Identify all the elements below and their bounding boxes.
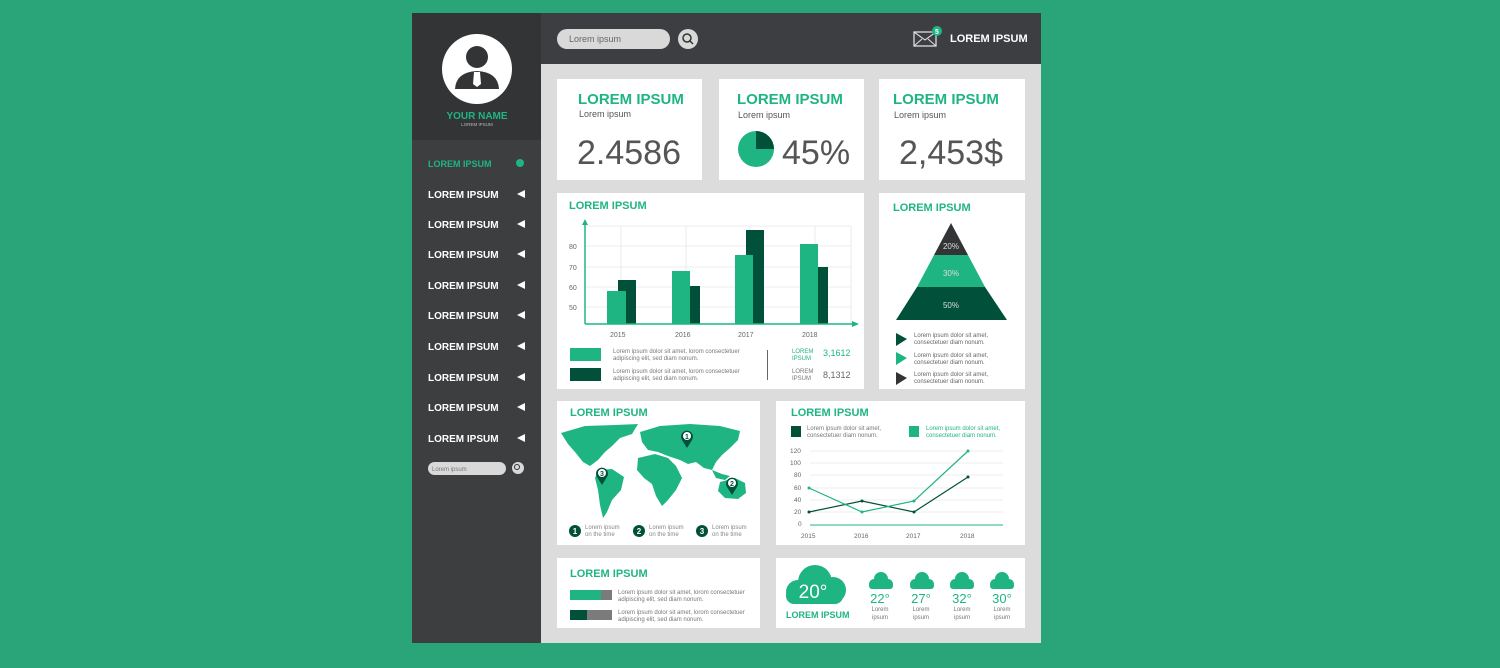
pins: 2 (730, 481, 734, 488)
panel: bar chart: 2016 (675, 332, 691, 339)
card: 2.4586: Lorem ipsum (579, 109, 631, 119)
icon: mail (914, 26, 942, 46)
panel: line chart: Lorem ipsum dolor sit amet, (807, 426, 881, 432)
legend: 8,1312 (823, 370, 851, 380)
legend: LOREM (792, 349, 813, 355)
menu: LOREM IPSUM (428, 342, 499, 353)
panel: bar chart: 2018 (802, 332, 818, 339)
panel: weather: Lorem (953, 607, 971, 613)
panel: weather: 22° (870, 591, 890, 606)
panel: pyramid: Lorem ipsum dolor sit amet, (914, 333, 988, 339)
avatar (442, 34, 512, 104)
panel: line chart: 80 (794, 472, 802, 479)
panel: bar chart: 60 (569, 285, 577, 292)
pins: 3 (600, 471, 604, 478)
top bar: LOREM IPSUM (950, 33, 1028, 45)
panel: pyramid: 20% (943, 242, 959, 251)
panel: weather: Lorem (871, 607, 889, 613)
map shapes (561, 424, 746, 518)
menu: LOREM IPSUM (428, 281, 499, 292)
panel: bar chart: LOREM IPSUM (569, 200, 647, 212)
legend: IPSUM (792, 356, 811, 362)
panel: line chart: 2017 (906, 533, 921, 540)
pins: 1 (685, 434, 689, 441)
panel: weather: Lorem (912, 607, 930, 613)
map legend: 3 (700, 527, 705, 536)
map legend: Lorem ipsum (585, 525, 620, 531)
menu: LOREM IPSUM (428, 373, 499, 384)
name: LOREM IPSUM (461, 122, 493, 127)
card: 2,453$: 2,453$ (899, 134, 1003, 172)
panel: bar chart: 70 (569, 265, 577, 272)
card: 2,453$: Lorem ipsum (894, 110, 946, 120)
panel: weather: 32° (952, 591, 972, 606)
card: 45%: Lorem ipsum (738, 110, 790, 120)
panel: bar chart: 80 (569, 244, 577, 251)
card: 45%: 45% (782, 134, 850, 172)
panel: progress bars: Lorem ipsum dolor sit amet, lorom consectetuer (618, 610, 745, 616)
menu: LOREM IPSUM (428, 434, 499, 445)
name (446, 111, 508, 127)
menu (428, 159, 525, 445)
panel: weather: ipsum (954, 615, 970, 621)
legend: 3,1612 (823, 348, 851, 358)
panel: weather (776, 558, 1025, 628)
card: 2,453$ (879, 79, 1025, 180)
panel: weather: 20° (799, 582, 827, 603)
panel: line chart: 120 (790, 448, 801, 455)
small clouds (869, 572, 1014, 589)
map legend: 2 (637, 527, 642, 536)
name: YOUR NAME (446, 111, 508, 122)
panel: progress bars: LOREM IPSUM (570, 568, 648, 580)
panel: bar chart (557, 193, 864, 389)
panel: weather: ipsum (913, 615, 929, 621)
panel: pyramid (879, 193, 1025, 389)
card: 2.4586: LOREM IPSUM (578, 91, 684, 108)
panel: weather: 30° (992, 591, 1012, 606)
panel: line chart: consectetuer diam nonum. (926, 433, 997, 439)
map legend: Lorem ipsum (712, 525, 747, 531)
panel: weather: ipsum (872, 615, 888, 621)
legend (570, 348, 851, 382)
panel: progress bars: Lorem ipsum dolor sit amet, lorom consectetuer (618, 590, 745, 596)
panel: bar chart: 2015 (610, 332, 626, 339)
panel: progress bars: adipiscing elit, sed diam nonum. (618, 597, 704, 603)
panel: line chart: 2016 (854, 533, 869, 540)
icon: big cloud (786, 565, 846, 604)
panel: pyramid: 50% (943, 301, 959, 310)
card: 2.4586 (557, 79, 702, 180)
map legend: Lorem ipsum (649, 525, 684, 531)
panel: weather: 27° (911, 591, 931, 606)
card: 45% (719, 79, 864, 180)
sidebar (412, 13, 541, 643)
menu: LOREM IPSUM (428, 159, 492, 169)
panel: pyramid: LOREM IPSUM (893, 202, 971, 214)
panel: line chart: 2018 (960, 533, 975, 540)
panel: pyramid: consectetuer diam nonum. (914, 360, 985, 366)
panel: line chart: 40 (794, 497, 802, 504)
map legend: on the time (585, 532, 615, 538)
panel: weather: LOREM IPSUM (786, 610, 850, 620)
top bar (541, 13, 1041, 64)
panel: pyramid: 30% (943, 269, 959, 278)
map legend: on the time (649, 532, 679, 538)
legend: adipiscing elit, sed diam nonum. (613, 376, 699, 382)
panel: line chart: consectetuer diam nonum. (807, 433, 878, 439)
legend: LOREM (792, 369, 813, 375)
panel: pyramid: Lorem ipsum dolor sit amet, (914, 372, 988, 378)
panel: line chart: 20 (794, 509, 802, 516)
panel: bar chart: 2017 (738, 332, 754, 339)
menu: LOREM IPSUM (428, 220, 499, 231)
menu: LOREM IPSUM (428, 190, 499, 201)
legend: adipiscing elit, sed diam nonum. (613, 356, 699, 362)
panel: line chart: 100 (790, 460, 801, 467)
panel: pyramid: Lorem ipsum dolor sit amet, (914, 353, 988, 359)
panel: weather: Lorem (993, 607, 1011, 613)
panel: pyramid: consectetuer diam nonum. (914, 340, 985, 346)
panel: line chart: 0 (798, 521, 802, 528)
panel: line chart: Lorem ipsum dolor sit amet, (926, 426, 1000, 432)
panel: line chart (776, 401, 1025, 545)
menu: LOREM IPSUM (428, 311, 499, 322)
panel: world map (557, 401, 760, 545)
card: 45%: LOREM IPSUM (737, 91, 843, 108)
panel: line chart: 60 (794, 485, 802, 492)
card: 2.4586: 2.4586 (577, 134, 681, 172)
map legend (569, 525, 747, 538)
map legend: on the time (712, 532, 742, 538)
menu: LOREM IPSUM (428, 403, 499, 414)
card: 2,453$: LOREM IPSUM (893, 91, 999, 108)
dashboard frame (412, 13, 1041, 643)
legend: Lorem ipsum dolor sit amet, lorom consectetuer (613, 349, 740, 355)
map legend: 1 (573, 527, 578, 536)
panel: line chart: 2015 (801, 533, 816, 540)
menu: LOREM IPSUM (428, 250, 499, 261)
panel: weather: ipsum (994, 615, 1010, 621)
sidebar search (428, 462, 524, 475)
panel: progress bars (557, 558, 760, 628)
panel: bar chart: 50 (569, 305, 577, 312)
panel: world map: LOREM IPSUM (570, 407, 648, 419)
legend: IPSUM (792, 376, 811, 382)
legend: Lorem ipsum dolor sit amet, lorom consectetuer (613, 369, 740, 375)
panel: progress bars: adipiscing elit, sed diam nonum. (618, 617, 704, 623)
top bar: Lorem ipsum (569, 34, 621, 44)
panel: pyramid: consectetuer diam nonum. (914, 379, 985, 385)
bars (607, 230, 828, 324)
pins (596, 431, 738, 495)
sidebar search: Lorem ipsum (432, 467, 467, 473)
panel: line chart: LOREM IPSUM (791, 407, 869, 419)
icon: mail: 5 (935, 29, 939, 36)
